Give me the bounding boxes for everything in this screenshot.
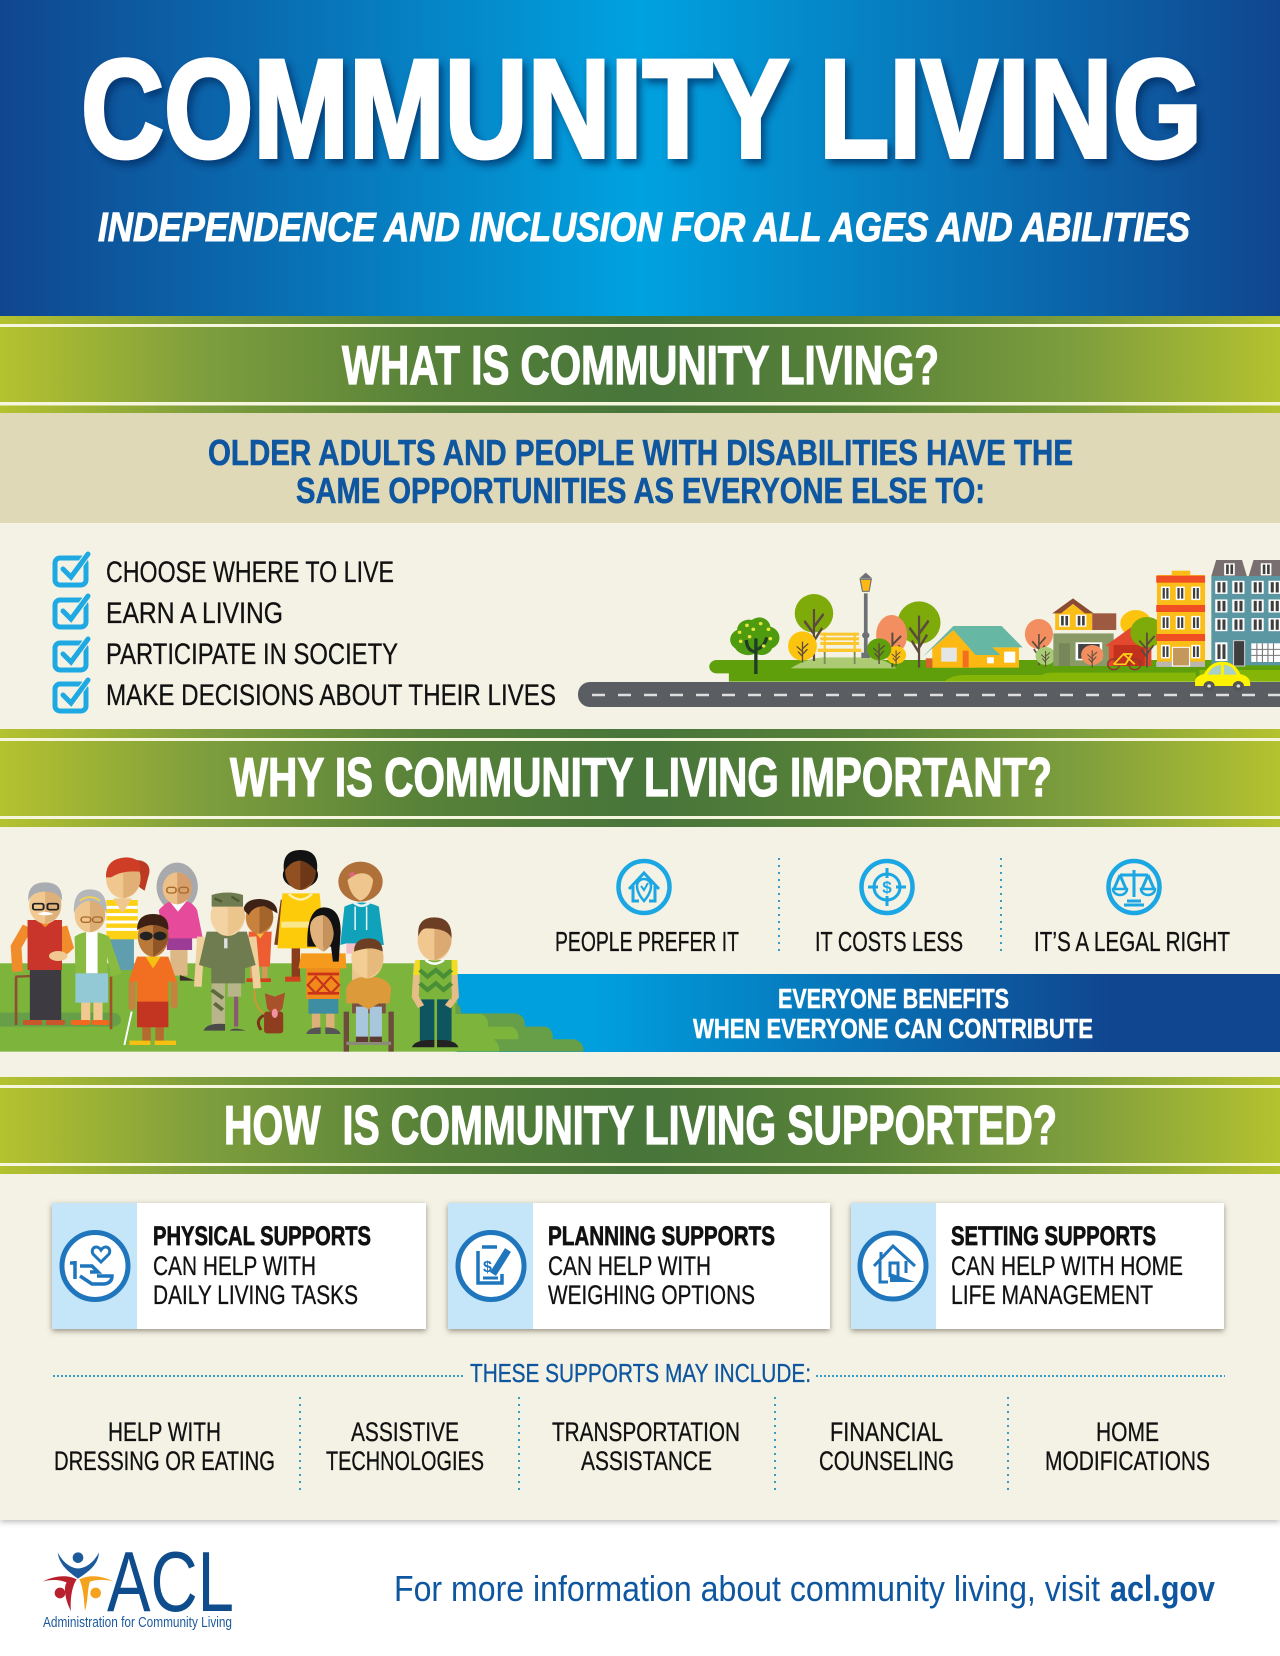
icon: document and pen: $ <box>483 1259 492 1276</box>
road <box>578 682 1280 707</box>
heading band: how is community living supported <box>0 1077 1280 1174</box>
support: home modifications: HOME <box>1096 1417 1159 1447</box>
support: home modifications: MODIFICATIONS <box>1045 1446 1210 1476</box>
banner: everyone benefits: WHEN EVERYONE CAN CONTRIBUTE <box>693 1013 1093 1044</box>
support: transportation assistance: ASSISTANCE <box>581 1446 712 1476</box>
icon: check 1 <box>55 554 88 585</box>
panel: reasons row <box>555 858 1230 957</box>
support: financial counseling <box>819 1417 954 1476</box>
banner: everyone benefits: EVERYONE BENEFITS <box>778 983 1009 1014</box>
icon: house with ramp <box>860 1233 926 1299</box>
checklist <box>55 554 556 712</box>
support: assistive technologies <box>326 1417 484 1476</box>
reason: it costs less: IT COSTS LESS <box>815 926 963 957</box>
person: woman in yellow dress <box>277 850 321 982</box>
support: dressing or eating: DRESSING OR EATING <box>54 1446 275 1476</box>
support types row <box>54 1397 1210 1495</box>
card: physical supports: DAILY LIVING TASKS <box>153 1280 358 1310</box>
person: teen with long black hair <box>299 907 346 1034</box>
yellow house <box>922 626 1023 668</box>
icon: hand holding heart <box>62 1232 128 1300</box>
car <box>1195 662 1250 691</box>
footer link text: acl.gov <box>1110 1568 1215 1609</box>
fruit tree <box>730 617 779 674</box>
support: dressing or eating: HELP WITH <box>108 1417 221 1447</box>
logo: ACL <box>42 1535 234 1631</box>
panel: opportunities statement: OLDER ADULTS AND PEOPLE WITH DISABILITIES HAVE THE <box>208 432 1073 473</box>
list item 1: CHOOSE WHERE TO LIVE <box>106 556 394 589</box>
card: setting supports: SETTING SUPPORTS <box>951 1221 1156 1251</box>
card: planning supports: PLANNING SUPPORTS <box>548 1221 775 1251</box>
bicycle <box>1108 653 1141 670</box>
person: veteran <box>198 892 257 1031</box>
reason: legal right <box>1034 861 1230 957</box>
dog and leash <box>254 990 285 1033</box>
card: physical supports: PHYSICAL SUPPORTS <box>153 1221 371 1251</box>
heading band: what is community living: WHAT IS COMMUNITY LIVING? <box>342 334 939 396</box>
icon: scales of justice <box>1108 861 1160 913</box>
list item 3: PARTICIPATE IN SOCIETY <box>106 638 398 671</box>
support: transportation assistance: TRANSPORTATION <box>552 1417 740 1447</box>
two-storey house <box>1052 598 1116 666</box>
icon: dollar target: $ <box>882 878 892 897</box>
person: boy in wheelchair <box>346 938 391 1052</box>
person: girl in blue hoodie <box>338 862 384 982</box>
red garage and trees <box>1120 610 1151 637</box>
card: planning supports: WEIGHING OPTIONS <box>548 1280 755 1310</box>
icon: house with heart check <box>618 861 670 913</box>
banner: everyone benefits <box>457 974 1280 1052</box>
person: man in argyle vest <box>412 917 458 1047</box>
person: blind man in orange <box>124 914 178 1045</box>
trees by house <box>898 601 940 644</box>
card: physical supports <box>52 1203 426 1329</box>
teal apartment <box>1211 560 1280 666</box>
heading band: why is community living important <box>0 729 1280 827</box>
panel: cream background <box>0 413 1280 1520</box>
icon: check 4 <box>55 680 88 711</box>
reason: people prefer it: PEOPLE PREFER IT <box>555 926 739 957</box>
icon: check 2 <box>55 596 88 627</box>
card: setting supports: CAN HELP WITH HOME <box>951 1251 1183 1281</box>
icon: document and pen <box>458 1232 524 1300</box>
illustration: diverse group of people <box>0 850 584 1052</box>
card: setting supports <box>851 1203 1224 1329</box>
trees by bench <box>795 594 833 633</box>
bench <box>818 633 861 653</box>
yellow apartment <box>1156 571 1205 667</box>
trees beyond house <box>1025 619 1053 649</box>
reason: people prefer it <box>555 861 739 957</box>
list item 4: MAKE DECISIONS ABOUT THEIR LIVES <box>106 679 556 712</box>
support: financial counseling: FINANCIAL <box>830 1417 943 1447</box>
person: ponytail woman <box>106 857 149 970</box>
reason: it costs less <box>815 861 963 957</box>
list item 2: EARN A LIVING <box>106 597 283 630</box>
logo caption: Administration for Community Living <box>43 1614 232 1631</box>
logo letters: ACL <box>107 1535 234 1630</box>
person: child in red <box>243 899 277 982</box>
support: financial counseling: COUNSELING <box>819 1446 954 1476</box>
support: transportation assistance <box>552 1417 740 1476</box>
heading band: what is community living <box>0 316 1280 413</box>
support: dressing or eating <box>54 1417 275 1476</box>
support: home modifications <box>1045 1417 1210 1476</box>
person: grey haired woman in pink <box>157 863 203 981</box>
panel: header <box>0 0 1280 316</box>
illustration: neighbourhood street <box>578 560 1280 707</box>
panel: opportunities statement <box>0 413 1280 523</box>
icon: dollar target <box>862 861 912 913</box>
lamp post <box>859 573 872 658</box>
logo mark <box>42 1552 114 1611</box>
card: setting supports: LIFE MANAGEMENT <box>951 1280 1153 1310</box>
person: old woman in green <box>71 889 122 1029</box>
footer link text: For more information about community living, visit <box>394 1568 1100 1609</box>
support: assistive technologies: ASSISTIVE <box>351 1417 459 1447</box>
card: physical supports: CAN HELP WITH <box>153 1251 316 1281</box>
person: old man with cane <box>15 882 68 1025</box>
icon: check 3 <box>55 639 88 670</box>
town scene <box>709 560 1280 691</box>
grass <box>0 963 584 1052</box>
support: assistive technologies: TECHNOLOGIES <box>326 1446 484 1476</box>
subheading: these supports may include: THESE SUPPORTS MAY INCLUDE: <box>470 1358 811 1388</box>
card: planning supports: CAN HELP WITH <box>548 1251 711 1281</box>
card: planning supports <box>448 1203 830 1329</box>
panel: opportunities statement: SAME OPPORTUNITIES AS EVERYONE ELSE TO: <box>296 470 985 511</box>
